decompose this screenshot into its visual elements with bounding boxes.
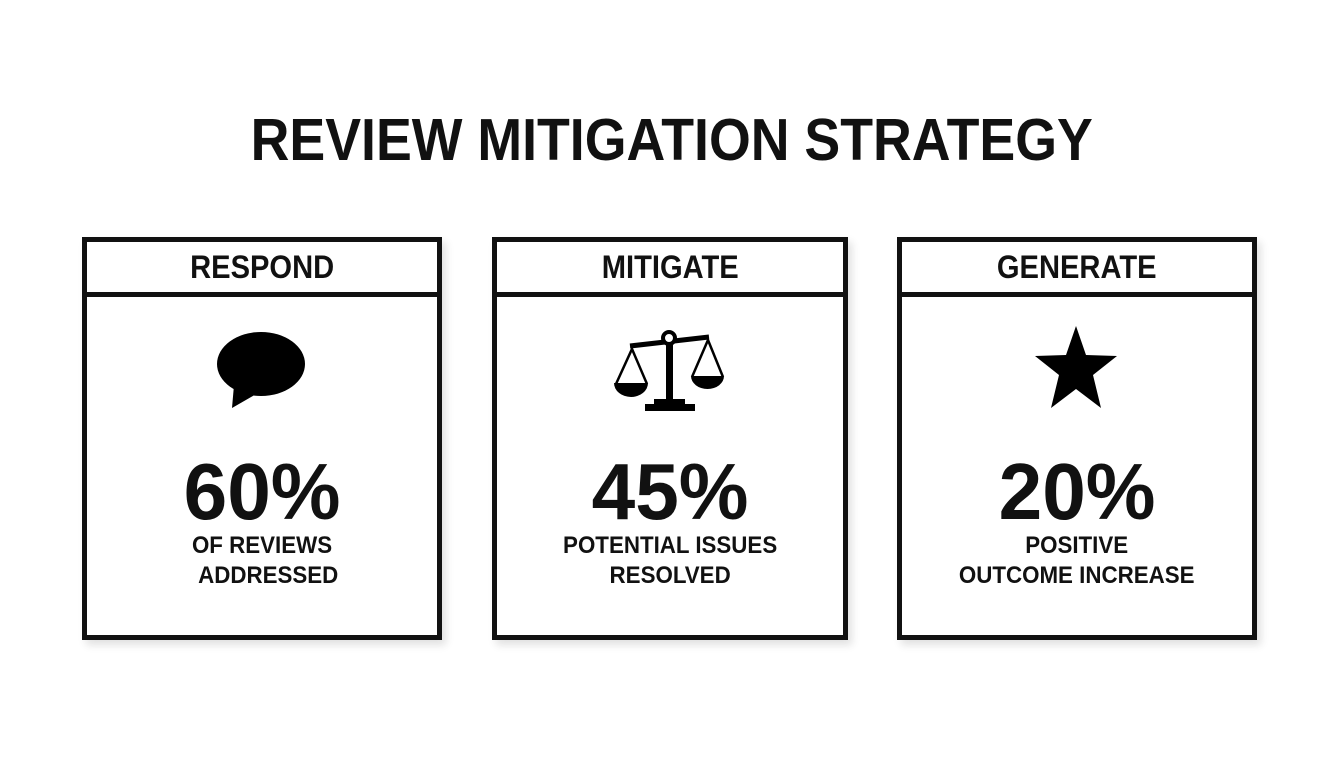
text: potential issues resolved: POTENTIAL ISSUES (563, 532, 777, 559)
stat: 45%: 45% (592, 447, 748, 536)
text: of reviews addressed: ADDRESSED (198, 562, 338, 589)
heading: mitigate: MITIGATE (602, 249, 738, 285)
text: positive outcome increase (959, 532, 1195, 589)
icon: speech bubble (217, 332, 305, 408)
text: of reviews addressed: OF REVIEWS (192, 532, 332, 559)
panel: respond (82, 237, 442, 640)
stat: 60%: 60% (184, 447, 340, 536)
heading: respond (87, 242, 437, 297)
panel: generate (897, 237, 1257, 640)
panel: mitigate (492, 237, 848, 640)
heading: generate (902, 242, 1252, 297)
text: positive outcome increase: POSITIVE (1026, 532, 1128, 559)
text: potential issues resolved: RESOLVED (609, 562, 731, 589)
text: of reviews addressed (192, 532, 338, 589)
icon: star (1035, 326, 1117, 408)
heading: generate: GENERATE (997, 249, 1157, 285)
heading: respond: RESPOND (190, 249, 334, 285)
stat: 20%: 20% (999, 447, 1155, 536)
heading: mitigate (497, 242, 843, 297)
text: potential issues resolved (563, 532, 777, 589)
icon: scales (614, 330, 724, 411)
text: positive outcome increase: OUTCOME INCREASE (959, 562, 1195, 589)
title: REVIEW MITIGATION STRATEGY (251, 107, 1093, 173)
